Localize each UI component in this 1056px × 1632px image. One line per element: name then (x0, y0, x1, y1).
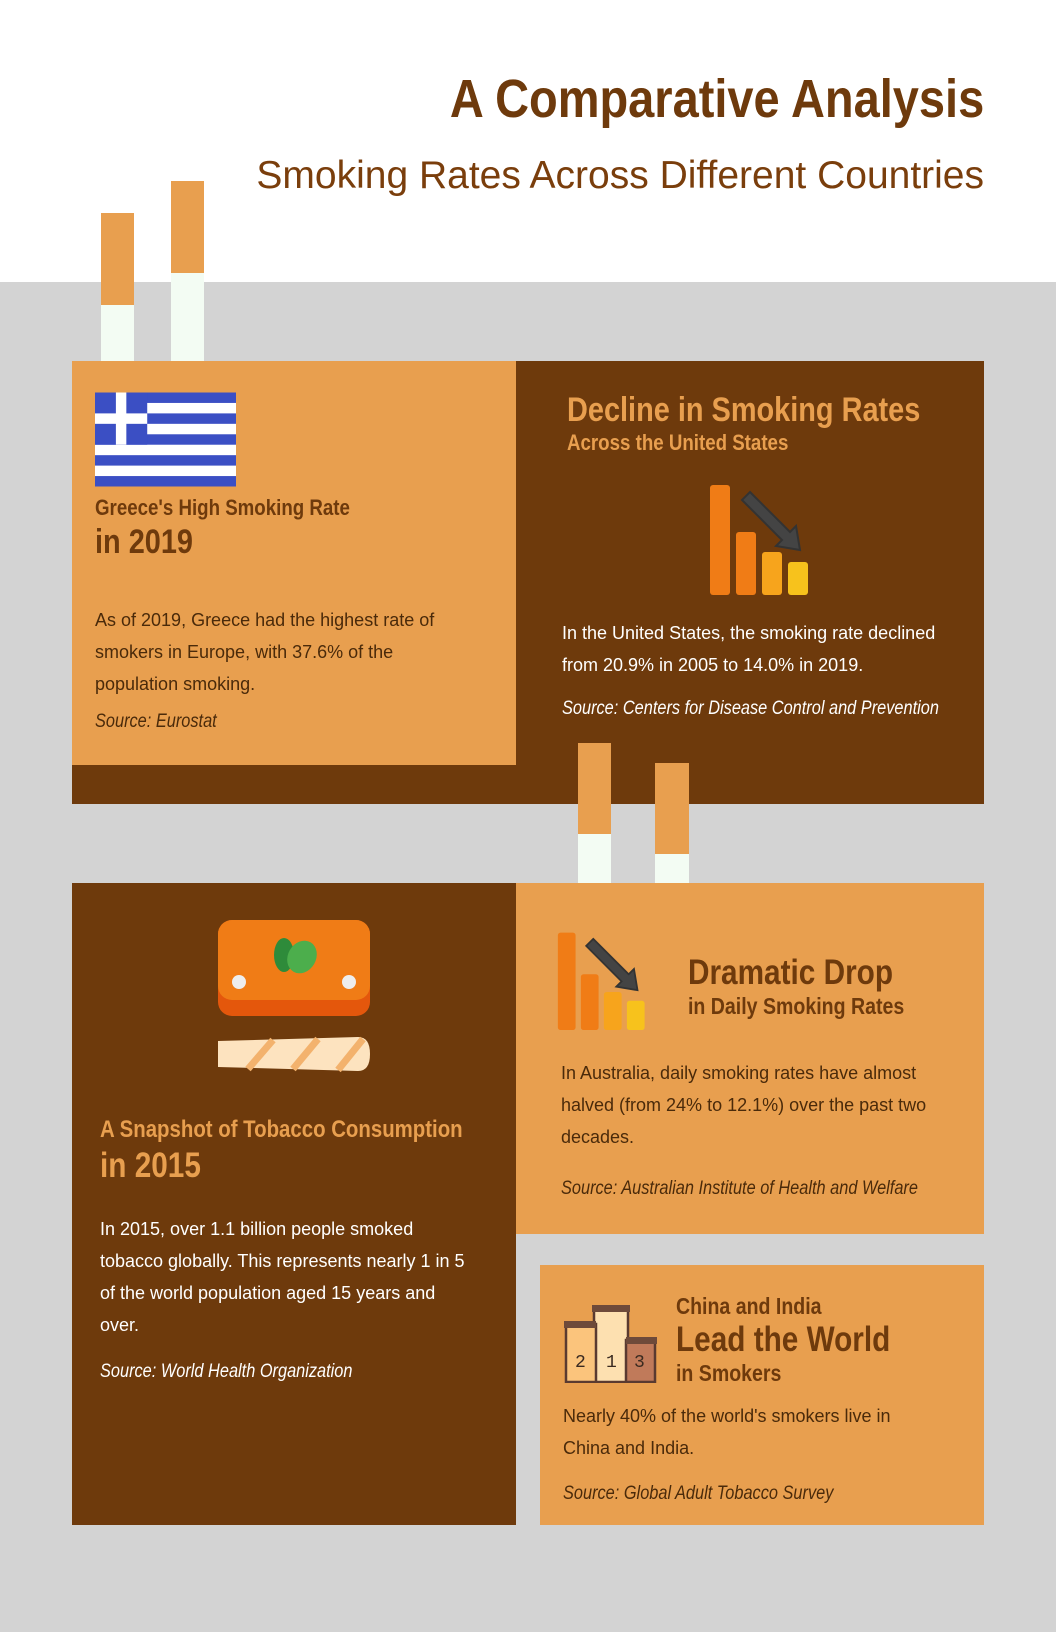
heading (688, 953, 904, 1019)
text: Nearly 40% of the world's smokers live in China and India. (563, 1406, 891, 1458)
source: Source: Eurostat (95, 711, 217, 732)
icon: podium (564, 1305, 657, 1383)
heading: in 2019 (95, 523, 193, 561)
icon: bar chart down (710, 485, 808, 595)
icon: cigarettes top (101, 181, 204, 361)
subtitle: Smoking Rates Across Different Countries (256, 154, 984, 197)
heading: Lead the World (676, 1320, 890, 1359)
panel: Australia (516, 883, 984, 1234)
heading: Greece's High Smoking Rate (95, 495, 350, 520)
panel: China and India (540, 1265, 984, 1525)
heading (567, 391, 920, 455)
icon: tobacco pouch and cigarette (218, 920, 370, 1072)
heading: Dramatic Drop (688, 953, 893, 992)
heading (100, 1116, 463, 1185)
heading (95, 495, 350, 561)
text: In Australia, daily smoking rates have almost halved (from 24% to 12.1%) over the past two decades. (561, 1063, 926, 1147)
panel: Greece (72, 361, 516, 765)
heading: in Daily Smoking Rates (688, 993, 904, 1019)
heading: Across the United States (567, 430, 788, 455)
panel: tobacco 2015 (72, 883, 516, 1525)
source: Source: Australian Institute of Health and Welfare (561, 1178, 918, 1199)
text: In the United States, the smoking rate declined from 20.9% in 2005 to 14.0% in 2019. (562, 623, 935, 675)
source: Source: Global Adult Tobacco Survey (563, 1483, 833, 1504)
heading: in Smokers (676, 1360, 781, 1386)
icon: podium: 1 (606, 1353, 617, 1373)
heading: A Snapshot of Tobacco Consumption (100, 1116, 463, 1143)
icon: cigarettes middle (578, 743, 689, 883)
icon: bar chart down (558, 932, 645, 1030)
text: In 2015, over 1.1 billion people smoked tobacco globally. This represents nearly 1 in 5 of the world population aged 15 years and over. (100, 1219, 465, 1335)
source: Source: Centers for Disease Control and Prevention (562, 698, 939, 719)
icon: podium: 2 (575, 1353, 586, 1373)
heading (676, 1293, 890, 1386)
icon: greek flag (95, 392, 236, 486)
title: A Comparative Analysis (450, 69, 984, 129)
heading: China and India (676, 1293, 822, 1319)
source: Source: World Health Organization (100, 1361, 352, 1382)
icon: podium: 3 (634, 1353, 645, 1373)
heading: Decline in Smoking Rates (567, 391, 920, 429)
panel: US decline (562, 391, 939, 719)
text: As of 2019, Greece had the highest rate of smokers in Europe, with 37.6% of the population smoking. (95, 610, 434, 694)
heading: in 2015 (100, 1146, 201, 1185)
panel: dark US background (72, 361, 984, 804)
